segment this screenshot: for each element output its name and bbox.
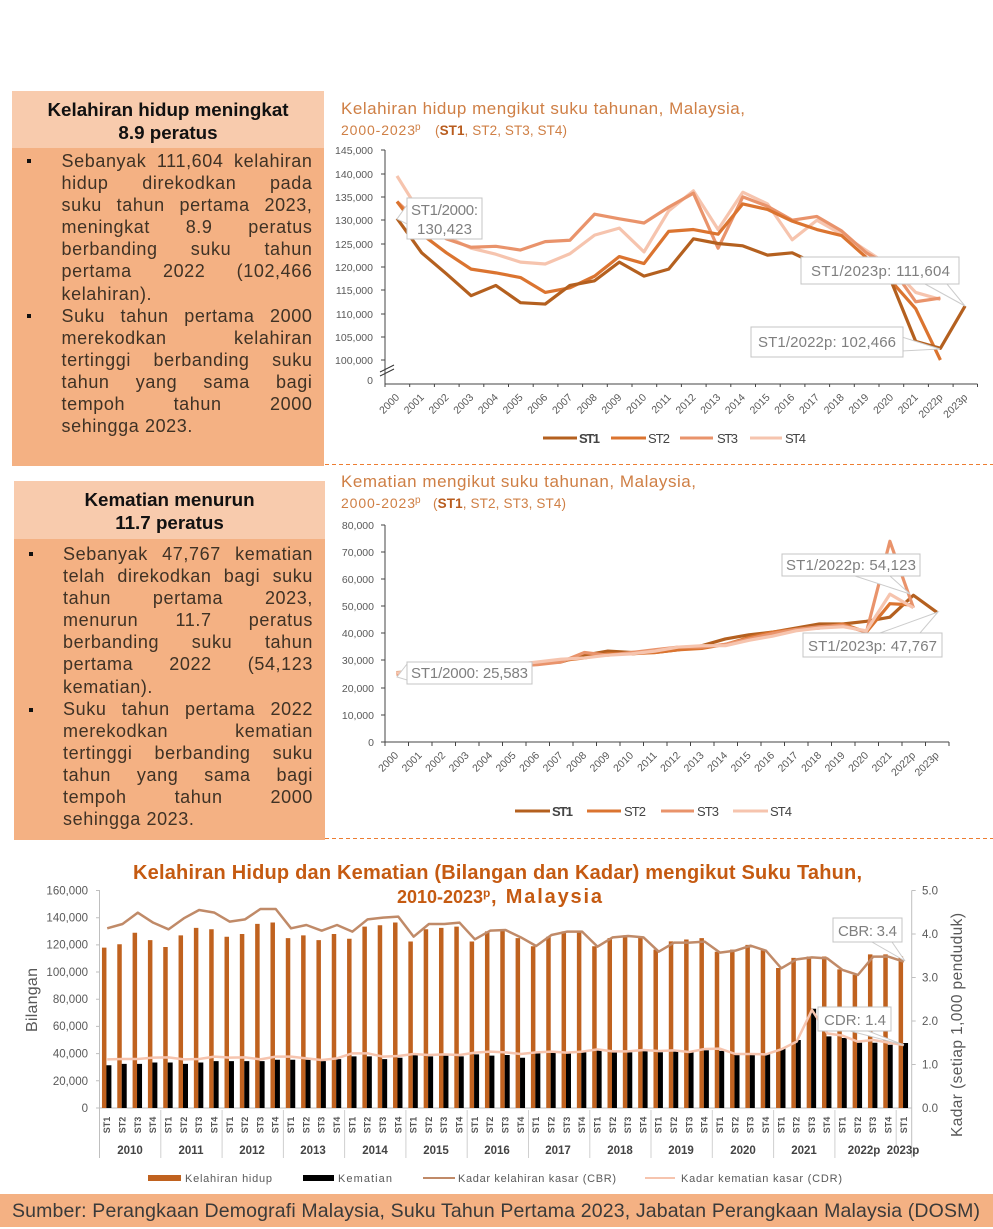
legend: combined chart: Kelahiran hidup <box>185 1173 272 1185</box>
quarter labels: ST4 <box>332 1117 342 1133</box>
callout: ST1/2022p births <box>751 327 940 357</box>
quarter labels: ST3 <box>807 1117 817 1133</box>
text block: births summary: hidup direkodkan pada <box>62 173 312 193</box>
quarter labels: ST2 <box>546 1117 556 1133</box>
heading: deaths fall <box>14 481 325 539</box>
year labels: 2012 <box>239 1145 265 1157</box>
quarter labels: ST3 <box>562 1117 572 1133</box>
y axis: deaths: 20,000 <box>342 683 374 695</box>
year labels: 2014 <box>362 1145 388 1157</box>
x axis labels: live births: 2020 <box>871 392 896 417</box>
chart: deaths by quarter <box>341 472 949 819</box>
text block: births summary: berbanding suku tahun <box>62 239 312 259</box>
quarter labels: ST4 <box>638 1117 648 1133</box>
quarter labels: ST2 <box>485 1117 495 1133</box>
year labels: 2015 <box>423 1145 449 1157</box>
x axis labels: live births: 2004 <box>476 392 501 417</box>
quarter labels: ST1 <box>286 1117 296 1133</box>
left axis: count: 160,000 <box>46 886 88 898</box>
axis title: Bilangan: Bilangan <box>24 968 41 1032</box>
x axis labels: live births: 2019 <box>846 392 872 417</box>
y axis: live births: 135,000 <box>335 192 373 204</box>
year labels: 2010 <box>117 1145 143 1157</box>
x axis labels: live births: 2002 <box>427 392 452 417</box>
quarter labels: ST1 <box>838 1117 848 1133</box>
text block: deaths summary: kematian). <box>63 677 153 697</box>
quarter labels: ST3 <box>255 1117 265 1133</box>
callout: ST1/2023p births: ST1/2023p: 111,604 <box>811 263 950 280</box>
bullet: second births point <box>27 314 31 318</box>
text block: deaths summary: menurun 11.7 peratus <box>63 610 313 630</box>
callout: CBR <box>833 918 905 961</box>
chart title: live births: Kelahiran hidup mengikut suku tahunan, Malaysia, <box>341 99 745 118</box>
text block: births summary: Suku tahun pertama 2000 <box>62 306 312 326</box>
quarter labels: ST4 <box>577 1117 587 1133</box>
chart: live births by quarter <box>335 99 978 446</box>
x axis labels: deaths: 2014 <box>705 750 730 775</box>
callout: ST1/2022p deaths: ST1/2022p: 54,123 <box>786 557 916 574</box>
callout: ST1/2000 deaths <box>397 662 532 684</box>
callout: ST1/2023p deaths <box>803 612 942 657</box>
quarter labels: ST1 <box>592 1117 602 1133</box>
year labels <box>117 1110 919 1158</box>
x axis labels: live births: 2022p <box>916 392 946 421</box>
x axis labels: live births: 2005 <box>501 392 526 417</box>
left axis: count: 20,000 <box>53 1076 88 1088</box>
right axis: rate: 0.0 <box>922 1103 938 1115</box>
x axis labels: deaths: 2020 <box>846 750 871 775</box>
year labels: 2022p <box>848 1145 880 1157</box>
x axis labels: deaths: 2010 <box>611 750 636 775</box>
right axis: rate: 2.0 <box>922 1016 938 1028</box>
chart title: live births <box>341 99 745 138</box>
panel: deaths summary <box>14 481 325 840</box>
x axis labels: live births: 2007 <box>550 392 575 417</box>
quarter labels: ST2 <box>792 1117 802 1133</box>
source bar: Sumber: Perangkaan Demografi Malaysia, Suku Tahun Pertama 2023, Jabatan Perangkaan Malaysia (DOSM) <box>12 1200 980 1222</box>
right axis: rate: 4.0 <box>922 929 938 941</box>
quarter labels: ST3 <box>439 1117 449 1133</box>
chart title: deaths: p <box>415 495 421 506</box>
right axis: rate: 1.0 <box>922 1060 938 1072</box>
x axis labels: live births <box>377 392 970 421</box>
quarter labels: ST4 <box>393 1117 403 1133</box>
chart title: live births: p <box>415 122 421 133</box>
callout: ST1/2000 births: 130,423 <box>417 221 472 238</box>
x axis labels: live births: 2010 <box>624 392 649 417</box>
quarter labels: ST3 <box>623 1117 633 1133</box>
quarter labels: ST4 <box>148 1117 158 1133</box>
quarter labels: ST2 <box>730 1117 740 1133</box>
left axis: count: 140,000 <box>46 912 88 924</box>
heading: deaths fall: Kematian menurun <box>84 489 255 510</box>
chart title: combined <box>133 862 862 908</box>
text block: deaths summary: tertinggi berbanding suku <box>63 743 313 763</box>
quarter labels: ST1 <box>409 1117 419 1133</box>
x axis labels: deaths: 2018 <box>799 750 824 775</box>
quarter labels: ST1 <box>899 1117 909 1133</box>
x axis labels: live births: 2000 <box>377 392 402 417</box>
y axis: deaths <box>342 520 949 749</box>
quarter labels: ST1 <box>531 1117 541 1133</box>
quarter labels: ST4 <box>700 1117 710 1133</box>
text block: deaths summary: tempoh tahun 2000 <box>63 787 313 807</box>
x axis labels: live births: 2023p <box>941 392 970 421</box>
x axis labels: live births: 2008 <box>575 392 600 417</box>
text block: births summary: sehingga 2023. <box>62 416 193 436</box>
year labels: 2019 <box>668 1145 694 1157</box>
year labels: 2020 <box>730 1145 756 1157</box>
quarter labels: ST1 <box>654 1117 664 1133</box>
x axis labels: live births: 2012 <box>674 392 699 417</box>
quarter labels: ST3 <box>378 1117 388 1133</box>
y axis: live births: 120,000 <box>335 262 373 274</box>
left axis: count: 80,000 <box>53 994 88 1006</box>
x axis labels: deaths: 2006 <box>517 750 542 775</box>
source bar <box>0 1194 993 1227</box>
y axis: live births: 105,000 <box>335 332 373 344</box>
line: crude death rate <box>107 1010 904 1060</box>
legend: births quarters: ST2 <box>648 431 670 446</box>
callout: CDR <box>818 1007 904 1045</box>
legend: deaths quarters: ST1 <box>552 804 573 819</box>
quarter labels: ST2 <box>853 1117 863 1133</box>
text block: deaths summary: Sebanyak 47,767 kematian <box>63 544 313 564</box>
text block: births summary: kelahiran). <box>62 284 152 304</box>
chart: births and deaths count and rate <box>24 862 966 1185</box>
legend: deaths quarters: ST2 <box>624 804 646 819</box>
text block: births summary: tempoh tahun 2000 <box>62 394 312 414</box>
quarter labels: ST1 <box>776 1117 786 1133</box>
x axis labels: deaths: 2023p <box>912 750 942 779</box>
legend: deaths quarters: ST4 <box>770 804 792 819</box>
y axis: live births: 125,000 <box>335 239 373 251</box>
x axis labels: deaths: 2013 <box>682 750 707 775</box>
quarter labels <box>102 1117 909 1133</box>
quarter labels: ST3 <box>133 1117 143 1133</box>
quarter labels: ST4 <box>884 1117 894 1133</box>
y axis: live births: 115,000 <box>336 285 373 297</box>
x axis labels: live births: 2016 <box>772 392 797 417</box>
text block: births summary: merekodkan kelahiran <box>62 328 312 348</box>
heading: deaths fall: 11.7 peratus <box>115 512 224 532</box>
text block: deaths summary: pertama 2022 (54,123 <box>63 654 313 674</box>
text block: deaths summary: merekodkan kematian <box>63 721 313 741</box>
quarter labels: ST1 <box>164 1117 174 1133</box>
x axis labels: live births: 2021 <box>896 392 921 417</box>
quarter labels: ST2 <box>424 1117 434 1133</box>
quarter labels: ST1 <box>225 1117 235 1133</box>
callout: CBR: CBR: 3.4 <box>838 923 897 940</box>
x axis labels: live births: 2015 <box>748 392 773 417</box>
callout: ST1/2023p deaths: ST1/2023p: 47,767 <box>808 638 937 655</box>
callout: ST1/2023p births <box>801 257 965 306</box>
x axis labels: deaths: 2015 <box>729 750 754 775</box>
text block: births summary: tahun yang sama bagi <box>62 372 312 392</box>
x axis labels: deaths: 2012 <box>658 750 683 775</box>
right axis: rate: 5.0 <box>922 886 938 898</box>
heading: live births rise: 8.9 peratus <box>118 122 218 142</box>
x axis labels: live births: 2009 <box>599 392 625 417</box>
quarter labels: ST4 <box>209 1117 219 1133</box>
x axis labels: deaths <box>376 750 942 779</box>
text block: births summary: pertama 2022 (102,466 <box>62 261 312 281</box>
panel: live births summary <box>12 91 324 466</box>
callout: ST1/2022p deaths <box>782 554 920 594</box>
axis title: rate: Kadar (setiap 1,000 penduduk) <box>949 913 966 1137</box>
text block: births summary <box>62 151 312 436</box>
text block: deaths summary <box>63 544 313 829</box>
x axis labels: deaths: 2021 <box>870 750 895 775</box>
callout: ST1/2000 births: ST1/2000: <box>411 202 478 219</box>
right axis: rate: 3.0 <box>922 972 938 984</box>
quarter labels: ST2 <box>118 1117 128 1133</box>
quarter labels: ST4 <box>455 1117 465 1133</box>
chart title: deaths <box>341 472 696 511</box>
y axis: deaths: 70,000 <box>342 547 374 559</box>
chart title: live births: (ST1, ST2, ST3, ST4) <box>435 123 567 138</box>
x axis labels: deaths: 2017 <box>776 750 801 775</box>
quarter labels: ST2 <box>240 1117 250 1133</box>
x axis labels: deaths: 2002 <box>423 750 448 775</box>
text block: deaths summary: telah direkodkan bagi suku <box>63 566 313 586</box>
y axis: deaths: 10,000 <box>342 710 374 722</box>
legend: births quarters: ST4 <box>785 431 806 446</box>
y axis: live births: 0 <box>367 375 373 387</box>
legend: deaths quarters: ST3 <box>697 804 719 819</box>
x axis labels: deaths: 2022p <box>889 750 918 779</box>
legend: births quarters: ST1 <box>579 431 600 446</box>
bullet: second deaths point <box>29 708 33 712</box>
year labels: 2018 <box>607 1145 633 1157</box>
chart title: combined: , Malaysia <box>491 886 603 908</box>
line series: births ST1 to ST4 <box>397 176 965 360</box>
quarter labels: ST3 <box>746 1117 756 1133</box>
bullet: first births point <box>27 159 31 163</box>
chart title: live births: 2000-2023 <box>341 122 415 138</box>
bars: deaths <box>109 1009 906 1108</box>
year labels: 2021 <box>791 1145 817 1157</box>
x axis labels: live births: 2018 <box>822 392 847 417</box>
quarter labels: ST2 <box>669 1117 679 1133</box>
text block: deaths summary: tahun yang sama bagi <box>63 765 313 785</box>
quarter labels: ST1 <box>102 1117 112 1133</box>
y axis: deaths: 80,000 <box>342 520 374 532</box>
y axis: deaths: 60,000 <box>342 574 374 586</box>
x axis labels: deaths: 2009 <box>588 750 613 775</box>
x axis labels: deaths: 2019 <box>823 750 848 775</box>
quarter labels: ST1 <box>715 1117 725 1133</box>
x axis labels: deaths: 2016 <box>752 750 777 775</box>
x axis labels: deaths: 2004 <box>470 750 495 775</box>
y axis: deaths: 0 <box>368 737 374 749</box>
legend: combined chart: Kadar kelahiran kasar (CBR) <box>458 1173 616 1185</box>
bars: live births <box>104 922 901 1108</box>
callout: CDR: CDR: 1.4 <box>824 1012 886 1029</box>
callout: ST1/2022p births: ST1/2022p: 102,466 <box>758 334 896 351</box>
y axis: live births: 140,000 <box>335 169 373 181</box>
line series: deaths ST1 to ST4 <box>396 541 937 674</box>
y axis: live births: 145,000 <box>335 145 373 157</box>
quarter labels: ST1 <box>347 1117 357 1133</box>
quarter labels: ST2 <box>179 1117 189 1133</box>
quarter labels: ST3 <box>317 1117 327 1133</box>
y axis: deaths: 30,000 <box>342 655 374 667</box>
x axis labels: deaths: 2003 <box>447 750 472 775</box>
right axis: rate <box>912 886 938 1158</box>
legend: births quarters <box>543 431 806 446</box>
x axis labels: live births: 2013 <box>698 392 723 417</box>
callout: ST1/2000 deaths: ST1/2000: 25,583 <box>411 665 528 682</box>
quarter labels: ST2 <box>608 1117 618 1133</box>
chart title: combined: p <box>483 886 490 900</box>
y axis: deaths: 50,000 <box>342 601 374 613</box>
quarter labels: ST4 <box>271 1117 281 1133</box>
x axis labels: live births: 2001 <box>402 392 427 417</box>
quarter labels: ST2 <box>301 1117 311 1133</box>
y axis: deaths: 40,000 <box>342 628 374 640</box>
quarter labels: ST3 <box>868 1117 878 1133</box>
quarter labels: ST3 <box>194 1117 204 1133</box>
left axis: count: 100,000 <box>46 967 88 979</box>
quarter labels: ST4 <box>822 1117 832 1133</box>
x axis labels: live births: 2017 <box>797 392 822 417</box>
text block: births summary: suku tahun pertama 2023, <box>62 195 312 215</box>
x axis labels: deaths: 2008 <box>564 750 589 775</box>
chart title: combined: Kelahiran Hidup dan Kematian (Bilangan dan Kadar) mengikut Suku Tahun, <box>133 862 862 884</box>
quarter labels: ST3 <box>500 1117 510 1133</box>
legend: combined chart: Kadar kematian kasar (CDR) <box>681 1173 842 1185</box>
text block: deaths summary: Suku tahun pertama 2022 <box>63 699 313 719</box>
legend: deaths quarters <box>515 804 792 819</box>
text block: deaths summary: sehingga 2023. <box>63 809 195 829</box>
x axis labels: live births: 2014 <box>723 392 748 417</box>
legend: births quarters: ST3 <box>717 431 738 446</box>
x axis labels: live births: 2003 <box>451 392 476 417</box>
text block: births summary: meningkat 8.9 peratus <box>62 217 312 237</box>
text block: deaths summary: tahun pertama 2023, <box>63 588 313 608</box>
x axis labels: deaths: 2011 <box>635 750 660 774</box>
bullet: first deaths point <box>29 552 33 556</box>
y axis: live births <box>335 145 978 387</box>
chart title: deaths: 2000-2023 <box>341 495 415 511</box>
quarter labels: ST4 <box>516 1117 526 1133</box>
year labels: 2011 <box>179 1145 204 1157</box>
callout: ST1/2000 births <box>397 198 482 239</box>
text block: births summary: tertinggi berbanding suku <box>62 350 312 370</box>
y axis: live births: 110,000 <box>336 309 373 321</box>
year labels: 2023p <box>887 1145 919 1157</box>
x axis labels: deaths: 2005 <box>494 750 519 775</box>
left axis: count <box>46 886 912 1158</box>
y axis: live births: 130,000 <box>335 215 373 227</box>
chart title: deaths: Kematian mengikut suku tahunan, Malaysia, <box>341 472 696 491</box>
x axis labels: live births: 2006 <box>525 392 550 417</box>
line: crude birth rate <box>107 909 904 975</box>
year labels: 2016 <box>484 1145 510 1157</box>
legend: combined chart: Kematian <box>338 1173 392 1185</box>
y axis: live births: 100,000 <box>335 355 373 367</box>
chart title: deaths: (ST1, ST2, ST3, ST4) <box>433 496 566 511</box>
x axis labels: deaths: 2000 <box>376 750 401 775</box>
year labels: 2017 <box>545 1145 571 1157</box>
heading: live births rise: Kelahiran hidup meningkat <box>47 99 289 120</box>
quarter labels: ST2 <box>363 1117 373 1133</box>
heading: live births rise <box>12 91 324 148</box>
left axis: count: 40,000 <box>53 1048 88 1060</box>
x axis labels: live births: 2011 <box>649 392 674 416</box>
quarter labels: ST1 <box>470 1117 480 1133</box>
text block: deaths summary: berbanding suku tahun <box>63 632 313 652</box>
left axis: count: 120,000 <box>46 940 88 952</box>
year labels: 2013 <box>300 1145 326 1157</box>
chart title: combined: 2010-2023 <box>397 887 483 907</box>
quarter labels: ST4 <box>761 1117 771 1133</box>
legend: combined chart <box>148 1173 842 1185</box>
x axis labels: deaths: 2001 <box>400 750 425 775</box>
left axis: count: 0 <box>82 1103 88 1115</box>
left axis: count: 60,000 <box>53 1021 88 1033</box>
x axis labels: deaths: 2007 <box>541 750 566 775</box>
quarter labels: ST3 <box>684 1117 694 1133</box>
text block: births summary: Sebanyak 111,604 kelahiran <box>62 151 312 171</box>
